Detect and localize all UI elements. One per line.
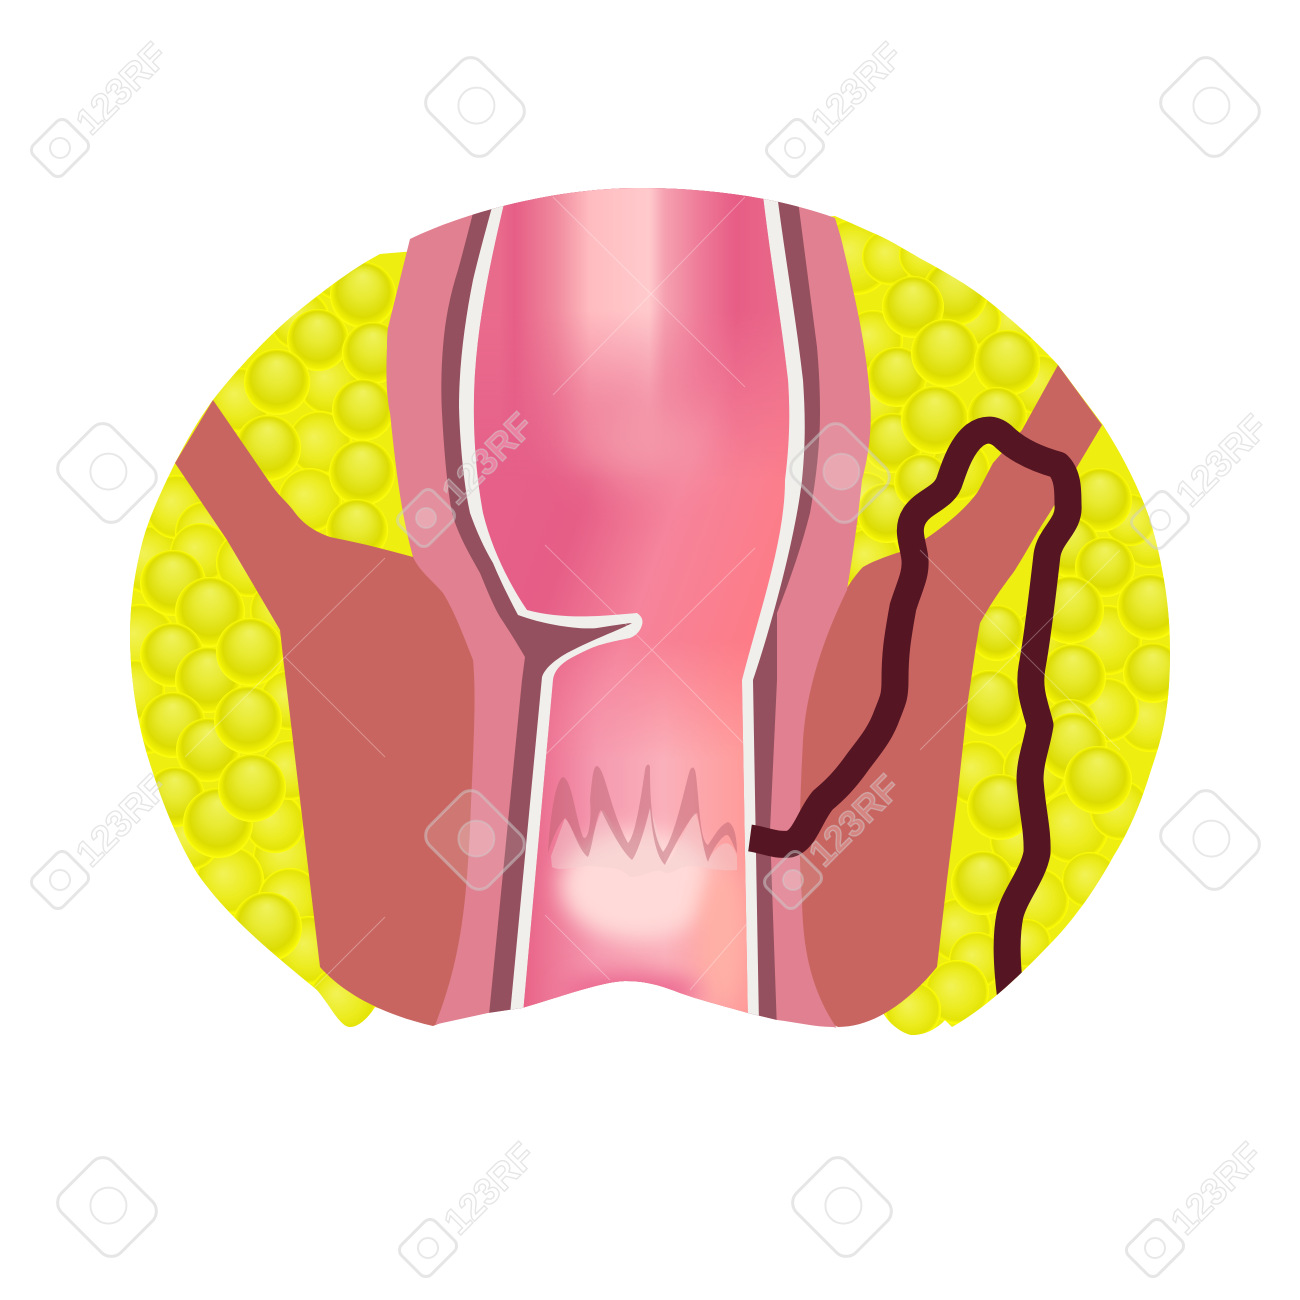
white mucosal lining bbox=[459, 170, 805, 1025]
outer pink wall bbox=[386, 170, 871, 1040]
left sphincter muscle bbox=[175, 400, 500, 1026]
right sphincter muscle bbox=[780, 365, 1102, 1027]
bowel tube bbox=[386, 160, 871, 1040]
crosshair watermark lines bbox=[185, 197, 1120, 1017]
watermarks: 123RF bbox=[1163, 1135, 1270, 1242]
fistula tract bbox=[750, 430, 1068, 1000]
watermarks: 123RF bbox=[436, 1135, 543, 1242]
watermarks: 123RF bbox=[803, 35, 910, 142]
watermarks: 123RF bbox=[68, 767, 175, 874]
watermarks: 123RF bbox=[68, 35, 175, 142]
watermarks: 123RF bbox=[434, 405, 541, 512]
lumen bbox=[474, 188, 790, 1013]
watermarks: 123RF bbox=[1168, 407, 1275, 514]
fatty tissue bbox=[104, 200, 1183, 1050]
anal valves bbox=[548, 764, 737, 877]
dark muscular layer bbox=[441, 170, 820, 1030]
watermarks: 123RF bbox=[801, 767, 908, 874]
